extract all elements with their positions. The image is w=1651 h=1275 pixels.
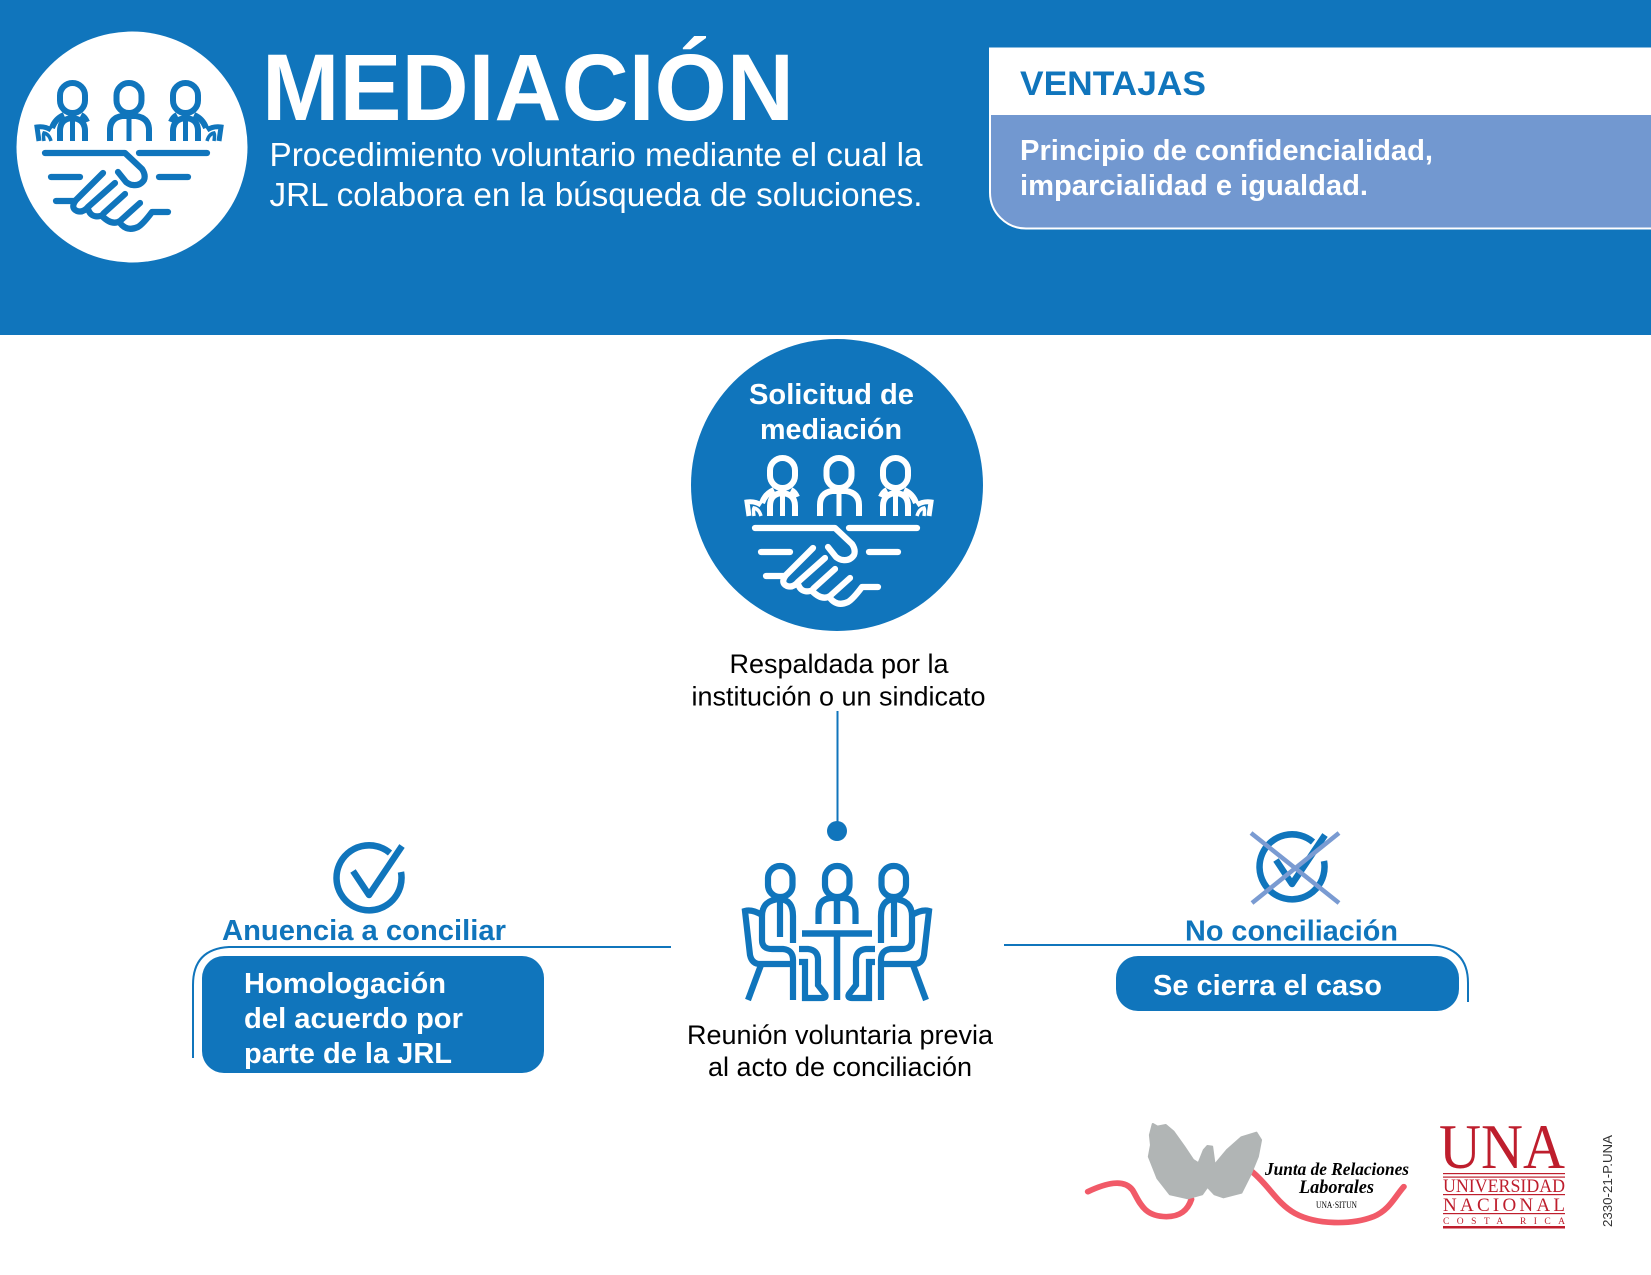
logo text: Laborales (1298, 1177, 1374, 1198)
icon: meeting at table (745, 866, 929, 1000)
header band (0, 0, 1651, 335)
ventajas header strip (989, 48, 1651, 114)
reunion caption: Reunión voluntaria previa (687, 1020, 994, 1050)
logo: universidad nacional: NACIONAL (1443, 1195, 1565, 1216)
logo text: Junta de Relaciones (1264, 1159, 1409, 1179)
print code: 2330-21-P.UNA (1600, 1135, 1615, 1227)
subtitle text (270, 136, 923, 213)
panel: ventajas (989, 48, 1651, 228)
solicitud heading: mediación (760, 414, 902, 446)
ventajas text: imparcialidad e igualdad. (1020, 170, 1368, 202)
solicitud caption: institución o un sindicato (692, 682, 986, 712)
homologación text: parte de la JRL (244, 1038, 452, 1070)
ventajas body (990, 114, 1651, 228)
box: se cierra el caso (1116, 956, 1459, 1011)
ventajas text (1020, 135, 1433, 202)
homologación text: del acuerdo por (244, 1003, 463, 1035)
solicitud icon (747, 458, 931, 604)
subtitle text: Procedimiento voluntario mediante el cual la (270, 136, 923, 173)
box text: Se cierra el caso (1153, 970, 1382, 1002)
homologación text: Homologación (244, 968, 446, 1000)
solicitud heading: Solicitud de (749, 379, 914, 411)
left connector bracket (193, 947, 671, 1058)
homologación text (244, 968, 463, 1070)
logo: universidad nacional: UNA (1439, 1112, 1565, 1182)
solicitud caption (692, 649, 986, 712)
ventajas text: Principio de confidencialidad, (1020, 135, 1433, 167)
solicitud heading (749, 379, 914, 446)
heading: no conciliación: No conciliación (1185, 916, 1398, 948)
header icon: white circle with mediation symbol (16, 32, 248, 262)
box: homologación (202, 956, 544, 1073)
icon: check mark (337, 845, 402, 910)
ventajas heading: VENTAJAS (1020, 65, 1206, 103)
logo: universidad nacional: UNIVERSIDAD (1443, 1176, 1565, 1197)
ribbon (1088, 1172, 1404, 1223)
right connector bracket (1004, 945, 1468, 1002)
heading: anuencia a conciliar: Anuencia a conciliar (222, 915, 506, 947)
solicitud de mediación circle (691, 339, 983, 631)
icon: crossed-out check (1251, 833, 1339, 903)
solicitud caption: Respaldada por la (730, 649, 949, 679)
reunion caption: al acto de conciliación (708, 1052, 972, 1082)
logo text: UNA·SITUN (1316, 1200, 1357, 1210)
reunion caption (687, 1020, 994, 1082)
wings (1149, 1124, 1261, 1198)
connector line with dot (827, 711, 847, 841)
logo: universidad nacional (1439, 1112, 1565, 1228)
subtitle text: JRL colabora en la búsqueda de soluciones. (270, 176, 923, 213)
logo: junta de relaciones laborales (1088, 1124, 1409, 1223)
logo: universidad nacional: COSTA RICA (1443, 1217, 1565, 1227)
logo text (1264, 1159, 1409, 1210)
title: MEDIACIÓN (262, 35, 794, 141)
